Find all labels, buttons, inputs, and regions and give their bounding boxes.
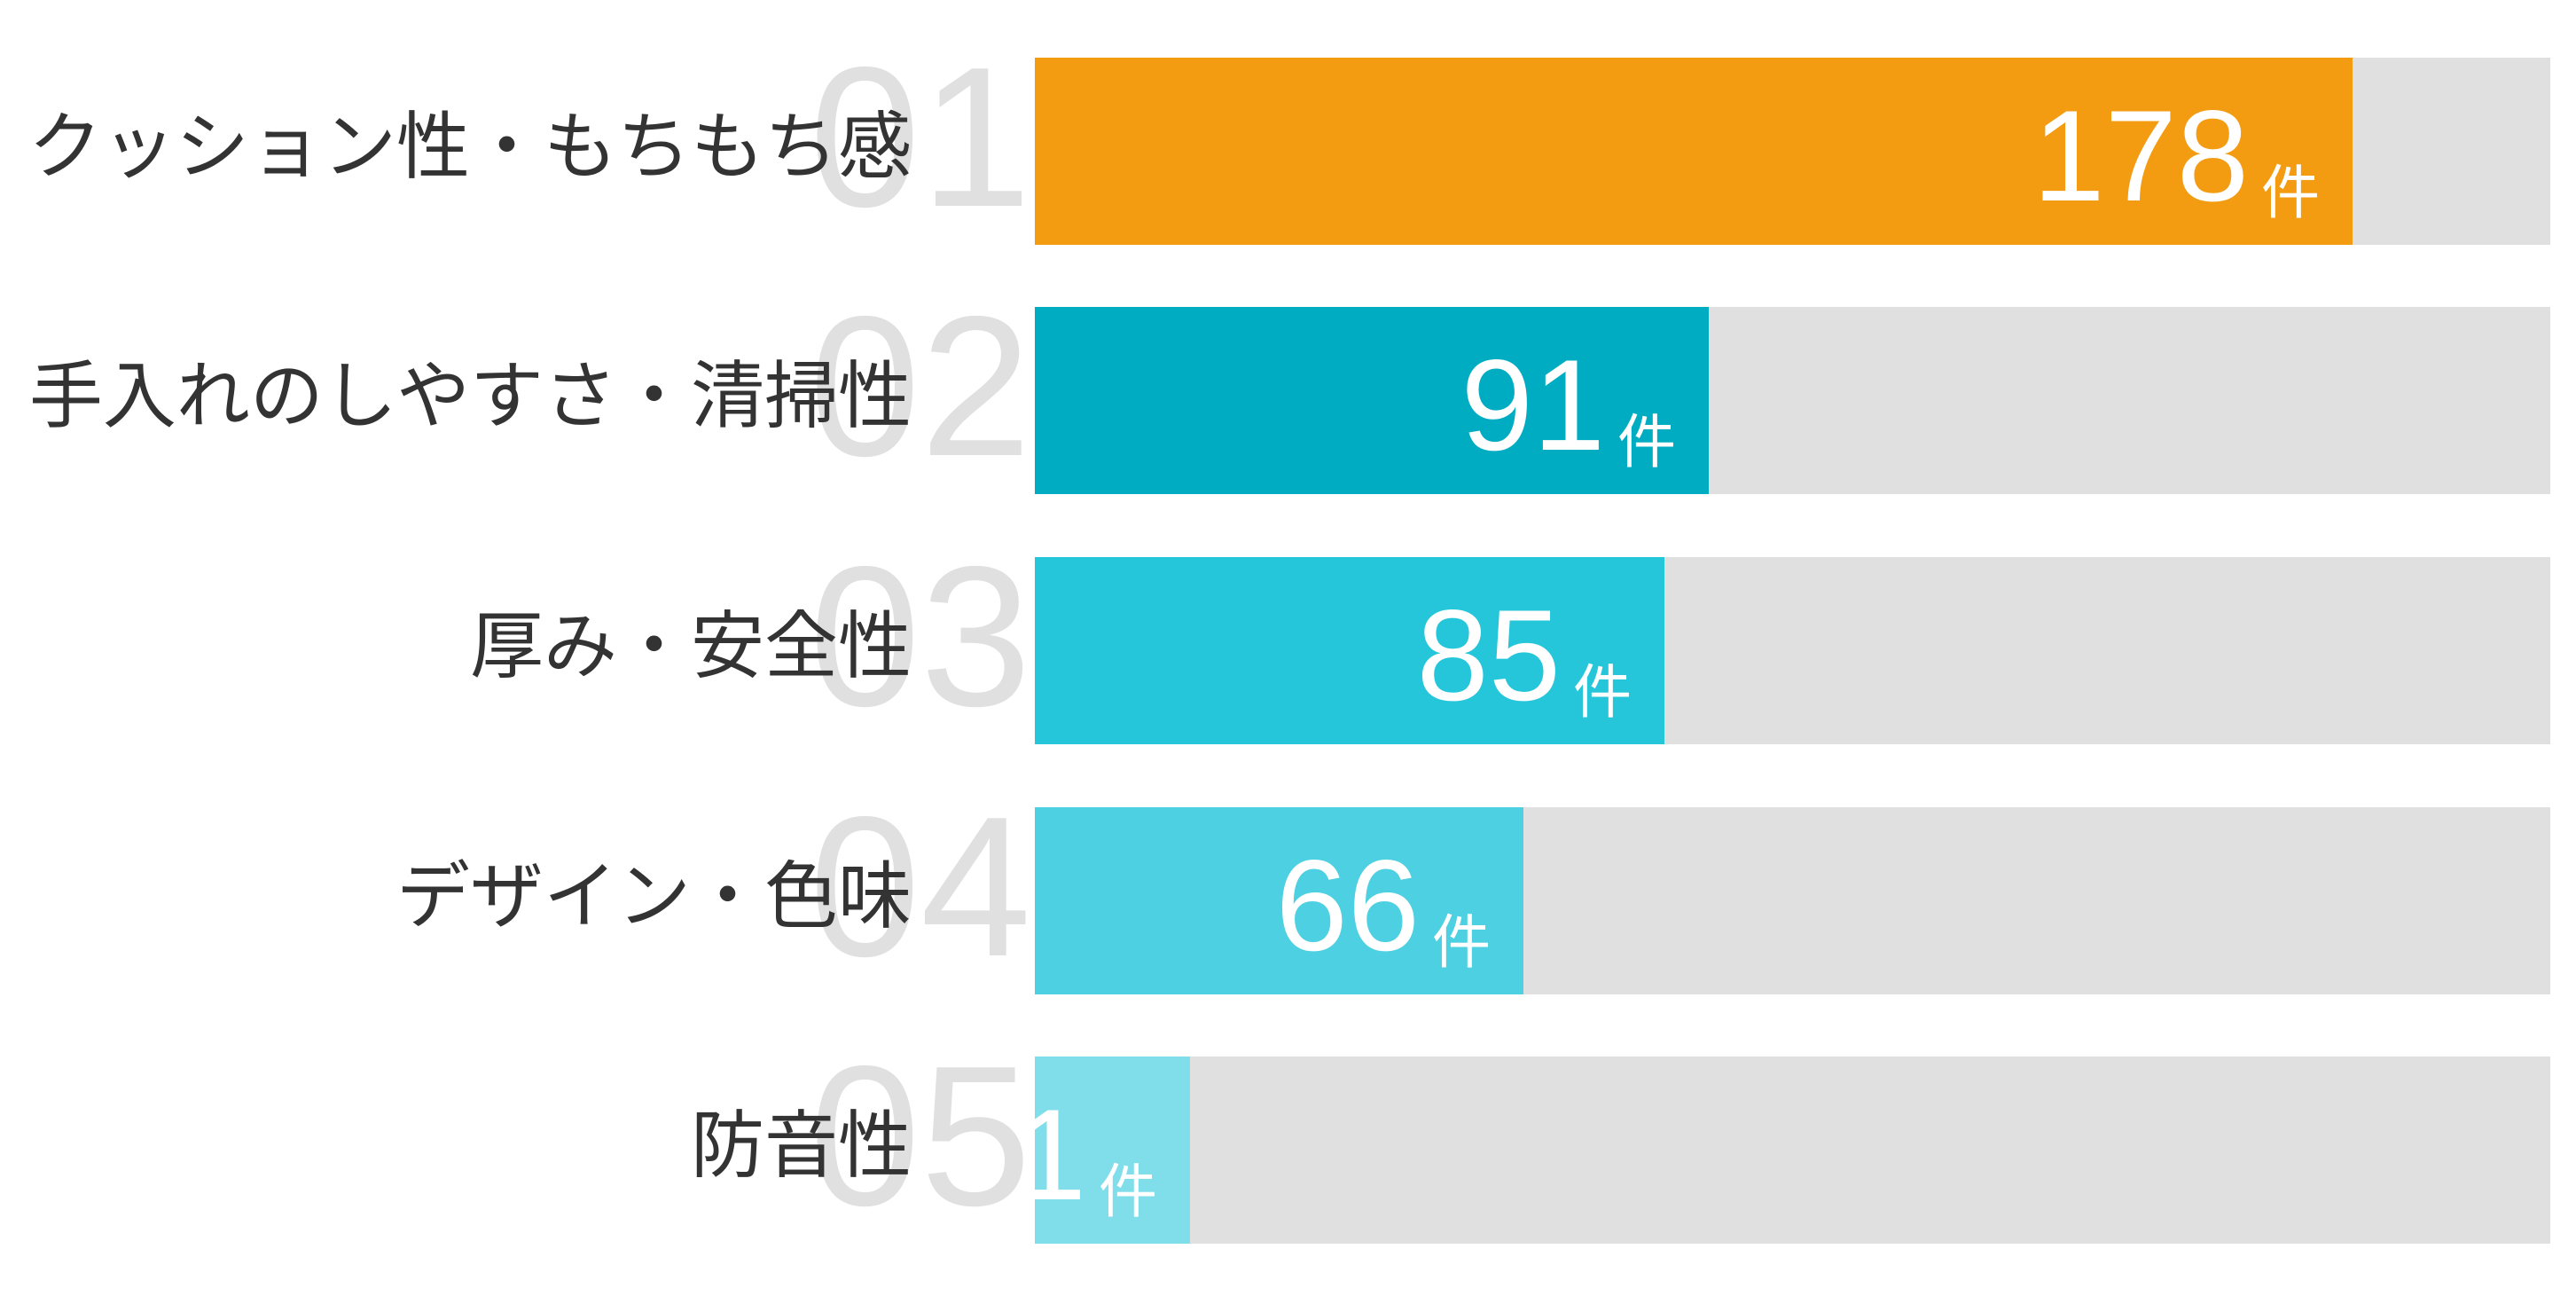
bar 5: [1035, 1057, 2550, 1244]
bar 4: [1035, 807, 2550, 994]
rank 04: 04: [810, 774, 1031, 998]
bar 3: 85件: [1417, 583, 1632, 730]
label 5: 防音性: [691, 1104, 912, 1187]
row 5: [691, 1024, 2550, 1247]
row 2: [29, 274, 2550, 498]
row 3: [470, 524, 2550, 748]
row 4: [396, 774, 2550, 998]
label 2: 手入れのしやすさ・清掃性: [29, 355, 912, 437]
bar 3: [1035, 557, 2550, 744]
rank 03: 03: [810, 524, 1031, 748]
rank 01: 01: [810, 25, 1031, 248]
row 1: [28, 25, 2550, 248]
rank 05: 05: [810, 1024, 1031, 1247]
rank 02: 02: [810, 274, 1031, 498]
bar 1: 178件: [2032, 83, 2320, 231]
bar 2: [1035, 307, 2550, 494]
bar 1: [1035, 58, 2550, 245]
label 3: 厚み・安全性: [470, 605, 912, 687]
label 1: クッション性・もちもち感: [28, 106, 912, 188]
label 4: デザイン・色味: [396, 855, 912, 938]
bar 4: 66件: [1276, 833, 1491, 980]
bar 2: 91件: [1461, 333, 1676, 480]
